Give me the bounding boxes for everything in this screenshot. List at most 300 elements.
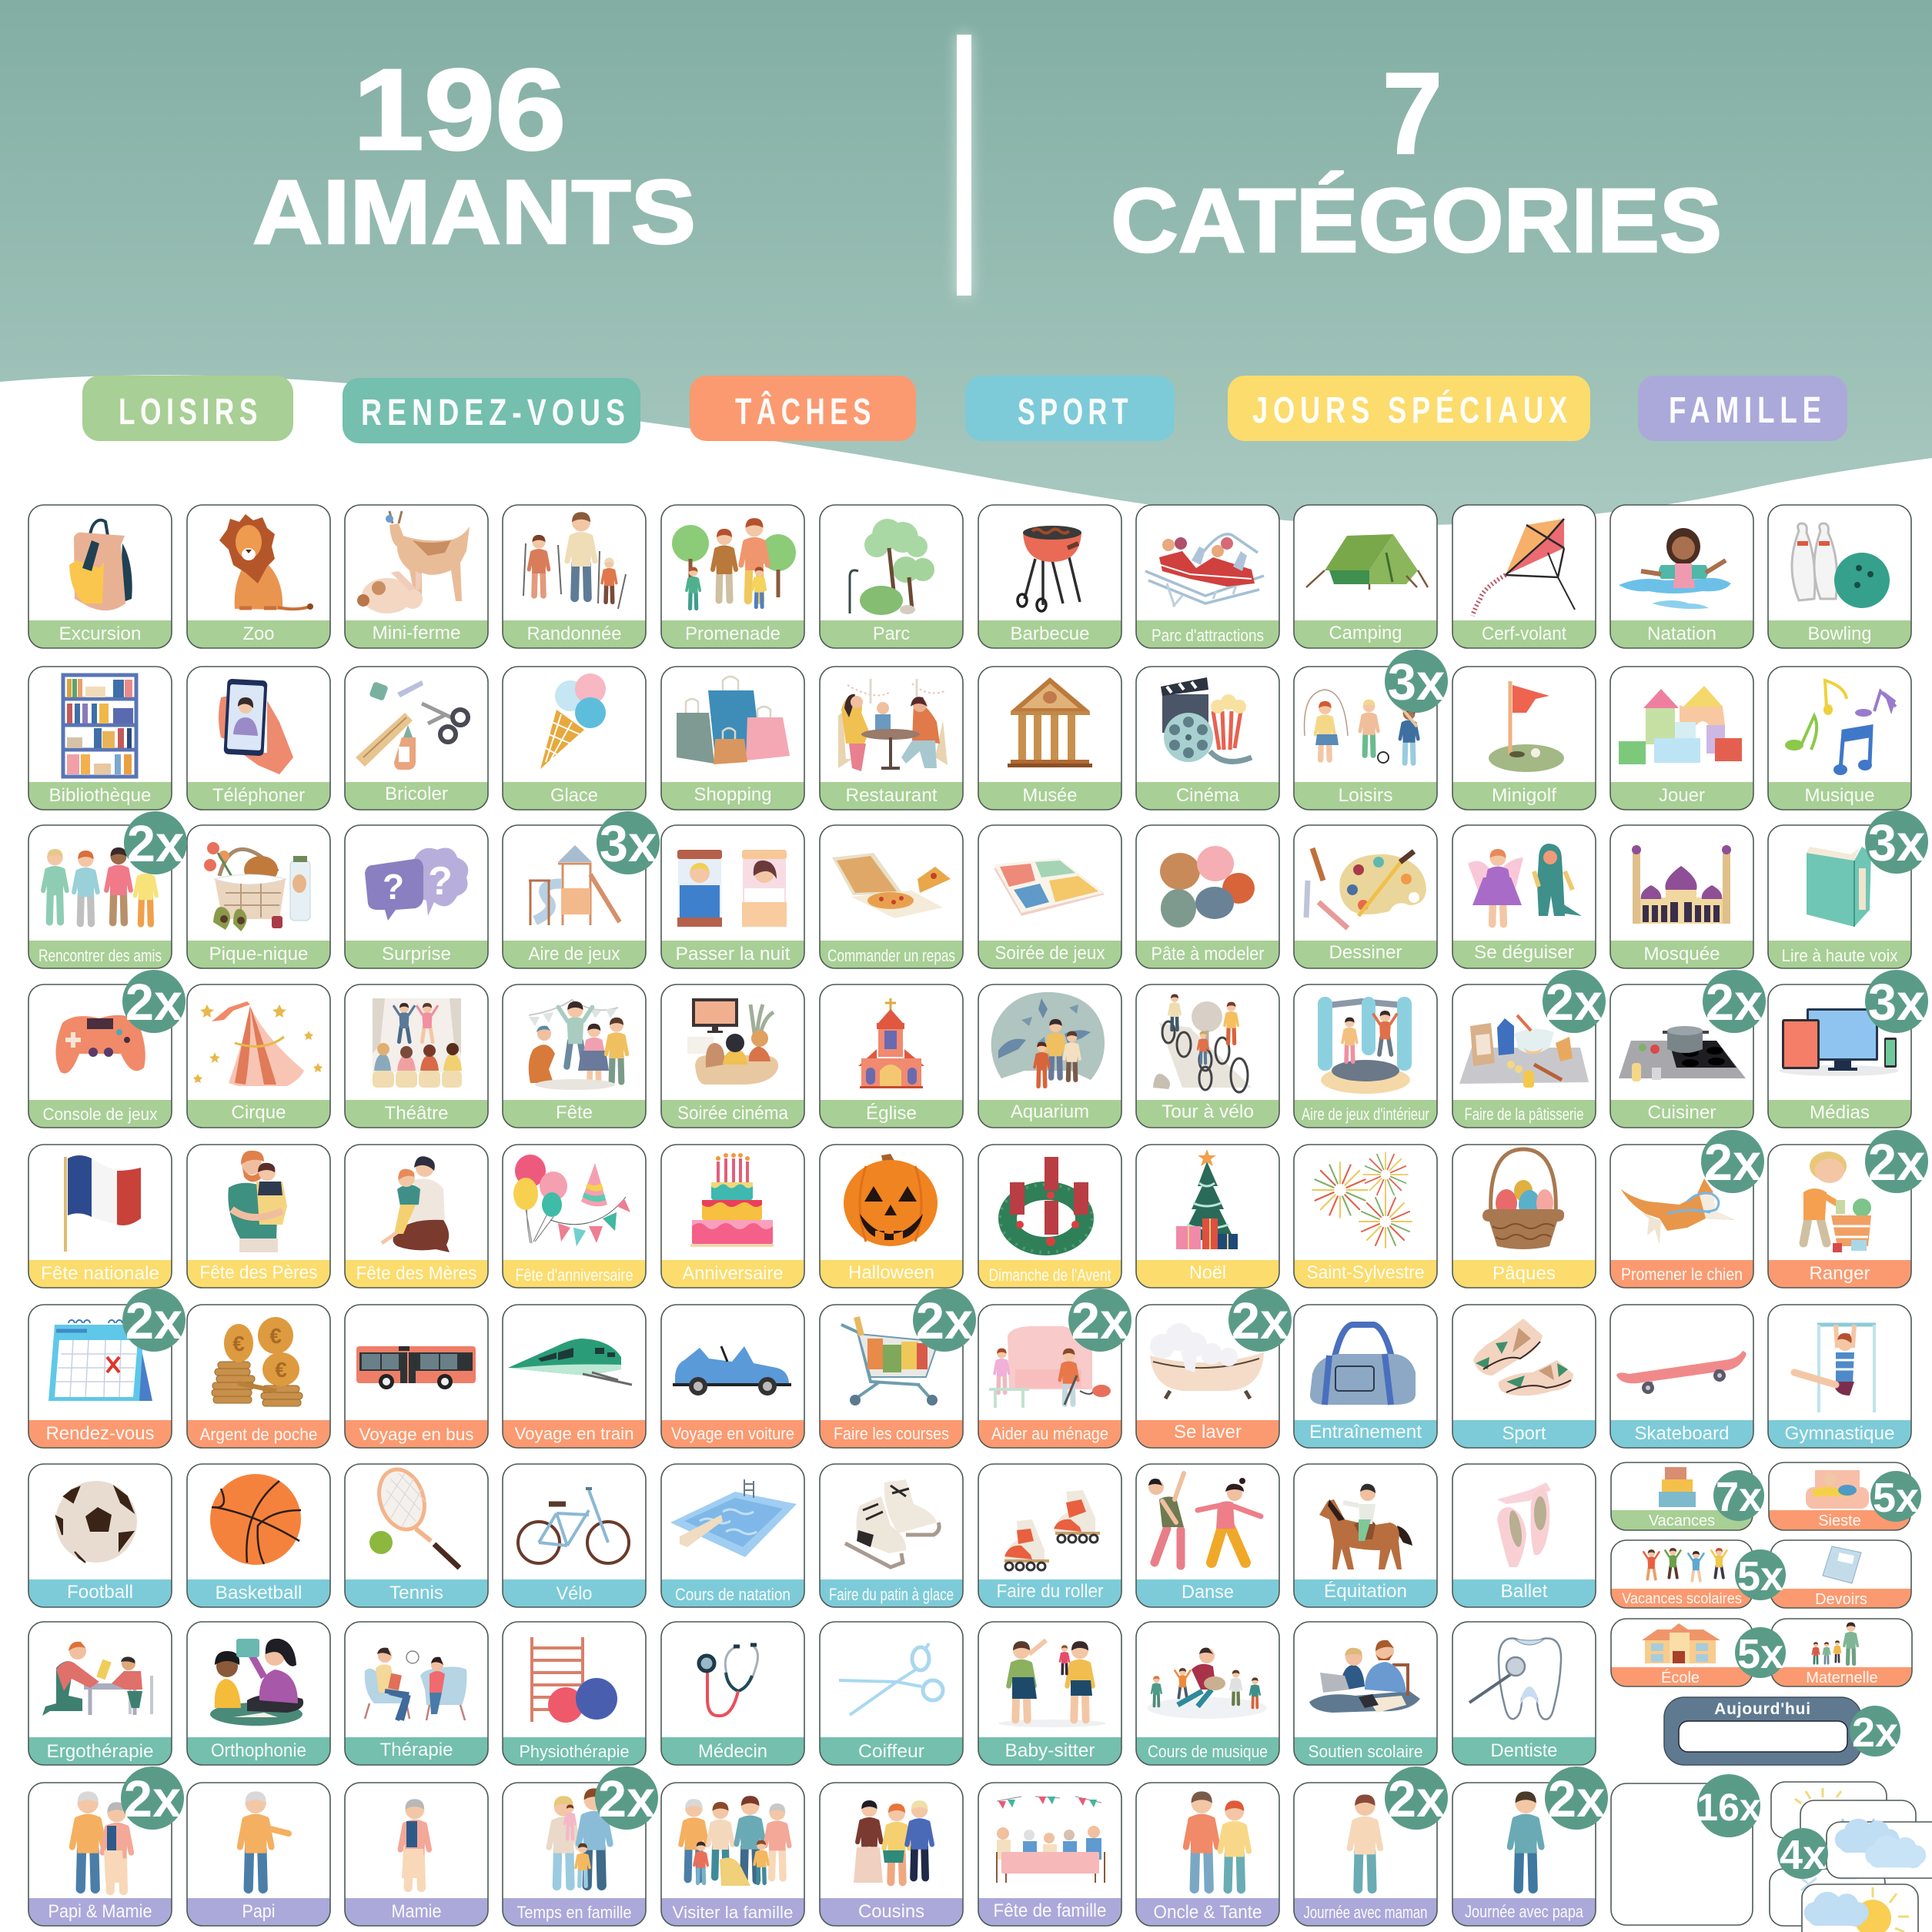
label: École [1661, 1669, 1700, 1686]
label: Tour à vélo [1162, 1101, 1254, 1122]
icon: indoor playground [1318, 997, 1412, 1094]
badge: 2x ménage: 2x [1071, 1292, 1128, 1350]
card: Aujourd'hui [1664, 1697, 1861, 1765]
card: Cours de natation [661, 1464, 804, 1607]
label: Orthophonie [211, 1740, 306, 1761]
card: Dentiste [1452, 1622, 1596, 1765]
icon: kids playing [1305, 690, 1418, 763]
label: Shopping [694, 784, 771, 805]
icon: costumes [1468, 844, 1582, 924]
card: Danse [1136, 1464, 1279, 1607]
icon: tutoring [1309, 1640, 1420, 1713]
icon: cousins [854, 1800, 932, 1883]
icon: hair scissors [839, 1643, 943, 1715]
badge: 2x rencontrer: 2x [127, 815, 184, 873]
label: Loisirs [1338, 785, 1393, 806]
label: Papi [242, 1901, 276, 1922]
badge: 3x aire de jeux: 3x [600, 815, 657, 873]
label: Noël [1189, 1262, 1226, 1283]
card: sun [1771, 1782, 1887, 1838]
card body [1770, 1540, 1911, 1608]
pill: tâches [690, 376, 916, 441]
icon: advent wreath [1000, 1157, 1092, 1252]
label: Fête nationale [41, 1263, 159, 1284]
card: Halloween [820, 1145, 963, 1288]
icon: beds [677, 850, 787, 927]
card: Vacances [1611, 1462, 1753, 1530]
label: Rencontrer des amis [38, 946, 162, 965]
card: Loisirs [1294, 667, 1437, 810]
icon: calendar [48, 1320, 152, 1401]
label: Visiter la famille [673, 1903, 793, 1922]
badge: 2x temps famille: 2x [598, 1770, 655, 1828]
label: Aire de jeux d'intérieur [1302, 1105, 1429, 1124]
label: Zoo [243, 623, 274, 644]
title: 196 aimants [252, 45, 696, 263]
label: Passer la nuit [676, 944, 791, 964]
icon: balloons and bunting [513, 1155, 630, 1246]
icon: baking [1459, 1015, 1589, 1088]
icon: family party [997, 1797, 1105, 1883]
badge: 2x aujourd'hui: 2x [1852, 1710, 1898, 1756]
label: Cousins [858, 1901, 924, 1922]
icon: game controller [55, 1015, 145, 1074]
badge: 2x papi mamie: 2x [124, 1770, 181, 1828]
icon: occupational therapy [42, 1642, 152, 1716]
card body [1611, 1619, 1753, 1686]
card: Faire les courses [820, 1305, 963, 1448]
card: Restaurant [820, 667, 963, 810]
label: Vacances [1649, 1513, 1715, 1529]
label: Halloween [848, 1262, 934, 1283]
icon: music notes [1785, 680, 1896, 775]
card: Temps en famille [503, 1783, 646, 1926]
card: Faire du roller [978, 1464, 1121, 1607]
icon: fireworks [1312, 1152, 1412, 1248]
card: Entraînement [1294, 1305, 1437, 1448]
icon: coins: € [275, 1358, 287, 1382]
icon: pizza box [832, 853, 951, 918]
badge: 3x loisirs: 3x [1388, 653, 1445, 711]
icon: coins: € [232, 1332, 245, 1355]
card: Fête des Pères [187, 1145, 330, 1288]
label: Oncle & Tante [1153, 1902, 1262, 1923]
card: Parc d'attractions [1136, 505, 1279, 648]
label: Aider au ménage [991, 1424, 1108, 1443]
pill: famille: FAMILLE [1669, 390, 1827, 431]
card: Baby-sitter [978, 1622, 1121, 1765]
card: Téléphoner [187, 667, 330, 810]
badge: 2x ranger: 2x [1868, 1134, 1925, 1192]
icon: skateboard [1616, 1351, 1746, 1394]
icon: craft tools [356, 680, 468, 770]
card: Voyage en voiture [661, 1305, 804, 1448]
label: Soirée cinéma [677, 1103, 789, 1124]
icon: christmas tree [1176, 1149, 1238, 1249]
label: Mini-ferme [373, 623, 460, 643]
card: Cirque [187, 984, 330, 1128]
icon: easter basket [1482, 1149, 1564, 1249]
icon: mother and child [382, 1156, 450, 1252]
label: Physiothérapie [519, 1742, 630, 1761]
label: Football [67, 1582, 133, 1603]
label: Fête [556, 1102, 593, 1123]
card: Orthophonie [187, 1622, 330, 1765]
label: Aquarium [1011, 1101, 1089, 1122]
card: Oncle & Tante [1136, 1783, 1279, 1926]
icon: sports bag [1310, 1325, 1416, 1405]
pill: tâches: TÂCHES [735, 390, 876, 433]
label: Pâte à modeler [1152, 944, 1265, 964]
label: Ergothérapie [46, 1741, 154, 1762]
title: 196 aimants: AIMANTS [252, 162, 696, 263]
card: Mosquée [1610, 825, 1753, 968]
card: Papi [187, 1783, 330, 1926]
card: Musique [1768, 667, 1911, 810]
badge: 2x cuisiner: 2x [1706, 974, 1763, 1031]
card: Vacances scolaires [1611, 1540, 1753, 1608]
icon: cinema [1161, 677, 1252, 762]
badge: 2x console: 2x [125, 974, 182, 1031]
icon: building blocks [1619, 686, 1742, 764]
icon: household help [989, 1326, 1111, 1408]
label: Tennis [389, 1583, 443, 1603]
badge: 5x sieste: 5x [1873, 1475, 1919, 1521]
icon: movie night [687, 998, 778, 1085]
icon: tennis racket [369, 1463, 460, 1568]
label: Excursion [58, 623, 142, 644]
card: Physiothérapie [503, 1622, 646, 1765]
card: Faire du patin à glace [820, 1464, 963, 1607]
card: Football [28, 1464, 172, 1607]
card: Aire de jeux [503, 825, 646, 968]
card: Fête nationale [28, 1145, 172, 1288]
icon: grandparents [72, 1791, 131, 1891]
label: Commander un repas [827, 946, 955, 965]
card body [1611, 1540, 1753, 1608]
card: Sieste [1769, 1462, 1910, 1530]
card: Saint-Sylvestre [1294, 1145, 1437, 1288]
icon: baby-sitter with kids [998, 1640, 1106, 1727]
label: Bowling [1807, 623, 1872, 644]
icon: screens [1779, 1008, 1899, 1076]
badge: 3x lire: 3x [1868, 814, 1925, 872]
icon: theatre stage [373, 998, 462, 1088]
icon: tooth and mirror [1469, 1639, 1561, 1720]
pill: rendez-vous [343, 378, 640, 443]
card: Bowling [1768, 505, 1911, 648]
label: Promener le chien [1621, 1265, 1743, 1284]
label: Skateboard [1635, 1423, 1729, 1444]
label: Musique [1804, 785, 1875, 806]
label: Argent de poche [200, 1425, 317, 1444]
label: Restaurant [845, 785, 938, 806]
card: Soutien scolaire [1294, 1622, 1437, 1765]
label: Dessiner [1329, 942, 1402, 963]
label: Gymnastique [1784, 1423, 1895, 1444]
pill: jours spéciaux [1228, 376, 1590, 441]
label: Camping [1329, 623, 1402, 643]
label: Jouer [1659, 785, 1705, 806]
icon: gymnast on bar [1794, 1325, 1876, 1412]
card: Basketball [187, 1464, 330, 1607]
label: Médecin [698, 1741, 767, 1762]
card: sun and cloud [1802, 1884, 1918, 1932]
label: Promenade [685, 623, 780, 644]
icon: father and child [228, 1151, 287, 1252]
card: Église [820, 984, 963, 1128]
icon: coins [212, 1317, 303, 1406]
pill: sport: SPORT [1018, 392, 1133, 433]
card: Ranger [1768, 1145, 1911, 1288]
label: Basketball [216, 1583, 302, 1603]
icon: uncle and aunt [1186, 1791, 1248, 1890]
card: Faire de la pâtisserie [1452, 984, 1596, 1128]
icon: aquarium [991, 992, 1105, 1086]
icon: bathtub [1150, 1323, 1264, 1399]
card: Lire à haute voix [1768, 825, 1911, 968]
card: Mini-ferme [345, 505, 488, 648]
label: Surprise [382, 944, 451, 964]
icon: shopping cart [841, 1317, 938, 1406]
icon: sneakers [1473, 1319, 1573, 1396]
title: 7 catégories: CATÉGORIES [1111, 170, 1722, 272]
icon: napping child on armchair [1806, 1470, 1869, 1509]
label: Glace [550, 785, 598, 806]
icon: grandmother [400, 1799, 429, 1888]
icon: father [1510, 1791, 1542, 1889]
card: Fête de famille [978, 1783, 1121, 1926]
title: 196 aimants: 196 [353, 45, 567, 174]
card: Argent de poche [187, 1305, 330, 1448]
card: Dessiner [1294, 825, 1437, 968]
card: Soirée cinéma [661, 984, 804, 1128]
label: Soutien scolaire [1309, 1742, 1422, 1761]
icon: therapy session [365, 1648, 466, 1720]
icon: phone in hand [219, 679, 293, 774]
badge: 16x [1696, 1774, 1761, 1837]
card: clouds [1827, 1819, 1932, 1878]
label: Faire du patin à glace [829, 1585, 954, 1604]
icon: stethoscope [699, 1645, 758, 1716]
card: Pique-nique [187, 825, 330, 968]
label: Sieste [1818, 1513, 1861, 1529]
card: Randonnée [503, 505, 646, 648]
pill: famille [1638, 376, 1847, 441]
card: Soirée de jeux [978, 825, 1121, 968]
label: Coiffeur [858, 1741, 924, 1762]
label: Théâtre [385, 1103, 448, 1124]
label: Musée [1022, 785, 1078, 806]
icon: family cycling [1153, 994, 1252, 1092]
icon: park [850, 519, 934, 615]
label: Danse [1182, 1582, 1234, 1603]
icon: restaurant [838, 679, 948, 771]
icon: barbecue [1018, 526, 1081, 611]
card: Minigolf [1452, 667, 1596, 810]
card: Théâtre [345, 984, 488, 1128]
icon: hikers [523, 512, 626, 609]
label: Parc d'attractions [1152, 626, 1264, 645]
label: Cerf-volant [1482, 623, 1566, 644]
pill: rendez-vous: RENDEZ-VOUS [361, 393, 630, 433]
icon: playground [529, 845, 620, 925]
badge: 2x courses: 2x [916, 1292, 973, 1350]
icon: birthday cake [690, 1153, 774, 1247]
label: Voyage en bus [359, 1425, 474, 1444]
card: Commander un repas [820, 825, 963, 968]
icon: goat and rabbit [357, 511, 470, 613]
card: Se laver [1136, 1305, 1279, 1448]
pill: loisirs: LOISIRS [119, 392, 262, 433]
label: Cuisiner [1647, 1102, 1716, 1123]
pill: jours spéciaux: JOURS SPÉCIAUX [1252, 389, 1573, 431]
card body [1771, 1619, 1912, 1686]
header background [0, 0, 1932, 525]
label: Faire les courses [834, 1424, 949, 1443]
card: blank magnets [1611, 1783, 1753, 1925]
card: Thérapie [345, 1622, 488, 1765]
icon: wall bars and balls [532, 1637, 617, 1723]
label: Entraînement [1309, 1422, 1422, 1442]
card: Sport [1452, 1305, 1596, 1448]
label: Cinéma [1176, 785, 1240, 806]
label: Papi & Mamie [48, 1901, 152, 1922]
card: Mamie [345, 1783, 488, 1926]
label: Dentiste [1490, 1740, 1558, 1761]
label: Journée avec papa [1465, 1902, 1584, 1921]
icon: swimmer [1619, 528, 1731, 609]
card: Fête des Mères [345, 1145, 488, 1288]
label: Parc [873, 623, 910, 644]
icon: lion [219, 514, 313, 610]
card: Cuisiner [1610, 984, 1753, 1128]
pill: sport [965, 376, 1175, 441]
icon: teacher and children [1812, 1623, 1857, 1664]
icon: family walking [672, 518, 796, 609]
card: Maternelle [1771, 1619, 1912, 1686]
card: Glace [503, 667, 646, 810]
label: Aire de jeux [528, 944, 620, 964]
icon: suitcases [1659, 1467, 1696, 1507]
badge: 2x maman: 2x [1388, 1770, 1445, 1828]
card: Journée avec papa [1452, 1783, 1596, 1926]
label: Natation [1647, 623, 1716, 644]
card: Parc [820, 505, 963, 648]
label: Mosquée [1644, 944, 1720, 964]
label: Équitation [1324, 1581, 1407, 1602]
card: Cinéma [1136, 667, 1279, 810]
icon: family together [549, 1788, 610, 1886]
icon: mother [1350, 1794, 1380, 1889]
card: Dimanche de l'Avent [978, 1145, 1121, 1288]
card: Vélo [503, 1464, 646, 1607]
icon: picnic basket [204, 842, 310, 931]
label: Ballet [1501, 1581, 1548, 1602]
icon: stove [1619, 1026, 1746, 1081]
card: Cours de musique [1136, 1622, 1279, 1765]
icon: horse and rider [1319, 1484, 1412, 1569]
badge: 2x papa: 2x [1548, 1770, 1605, 1828]
label: Mamie [391, 1901, 442, 1922]
icon: basketball [210, 1474, 301, 1565]
icon: bowling [1792, 523, 1890, 608]
label: Fête d'anniversaire [516, 1265, 633, 1285]
label: Soirée de jeux [994, 943, 1105, 964]
icon: backpack [69, 520, 132, 610]
label: Dimanche de l'Avent [988, 1265, 1111, 1285]
card: Papi & Mamie [28, 1783, 172, 1926]
card: Rencontrer des amis [28, 825, 172, 968]
card: Excursion [28, 505, 172, 648]
label: Vélo [556, 1583, 593, 1604]
card: Aquarium [978, 984, 1121, 1128]
badge: 2x rendez-vous: 2x [125, 1292, 182, 1350]
card: Ergothérapie [28, 1622, 172, 1765]
label: Cours de musique [1148, 1742, 1268, 1761]
icon: museum [1008, 677, 1092, 767]
weather cards [1770, 1782, 1932, 1932]
icon: bicycle [518, 1489, 629, 1563]
card: Devoirs [1770, 1540, 1911, 1608]
label: Bricoler [385, 784, 448, 804]
badge: 16x: 16x [1696, 1786, 1761, 1829]
icon: question bubbles [365, 848, 468, 921]
card body [1611, 1462, 1753, 1530]
label: Voyage en train [514, 1424, 633, 1443]
icon: ice skates [845, 1479, 939, 1567]
card: Gymnastique [1768, 1305, 1911, 1448]
label: Médias [1810, 1102, 1870, 1123]
label: Voyage en voiture [671, 1424, 794, 1443]
badge: 4x: 4x [1780, 1832, 1826, 1878]
label: Barbecue [1010, 623, 1090, 644]
card: rain [1800, 1800, 1916, 1862]
card: Visiter la famille [661, 1783, 804, 1926]
card: Coiffeur [820, 1622, 963, 1765]
badge: 3x médias: 3x [1868, 974, 1925, 1031]
icon: group of kids [43, 847, 156, 924]
label: Faire de la pâtisserie [1464, 1105, 1584, 1124]
card: Fête d'anniversaire [503, 1145, 646, 1288]
icon: notebook [1823, 1546, 1861, 1583]
icon: church [858, 998, 924, 1088]
card: Tennis [345, 1463, 488, 1607]
badge: 2x se laver: 2x [1232, 1292, 1289, 1350]
card: Rendez-vous [28, 1305, 172, 1448]
card: Cerf-volant [1452, 505, 1596, 648]
icon: golf flag [1489, 681, 1564, 772]
label: Téléphoner [212, 785, 305, 806]
card: Médias [1768, 984, 1911, 1128]
card: Journée avec maman [1294, 1783, 1437, 1926]
icon: ice cream [540, 674, 606, 769]
icon: book [1807, 847, 1871, 927]
card: Skateboard [1610, 1305, 1753, 1448]
card: Console de jeux [28, 984, 172, 1128]
card: Natation [1610, 505, 1753, 648]
card: Promenade [661, 505, 804, 648]
badge: 2x pâtisserie: 2x [1546, 974, 1603, 1031]
icon: train [508, 1339, 632, 1385]
label: Se laver [1174, 1422, 1242, 1442]
divider [957, 35, 971, 296]
card: Surprise [345, 825, 488, 968]
label: Minigolf [1492, 785, 1556, 806]
card: Équitation [1294, 1464, 1437, 1607]
icon: tent [1306, 534, 1428, 590]
icon: pumpkin [844, 1154, 938, 1246]
